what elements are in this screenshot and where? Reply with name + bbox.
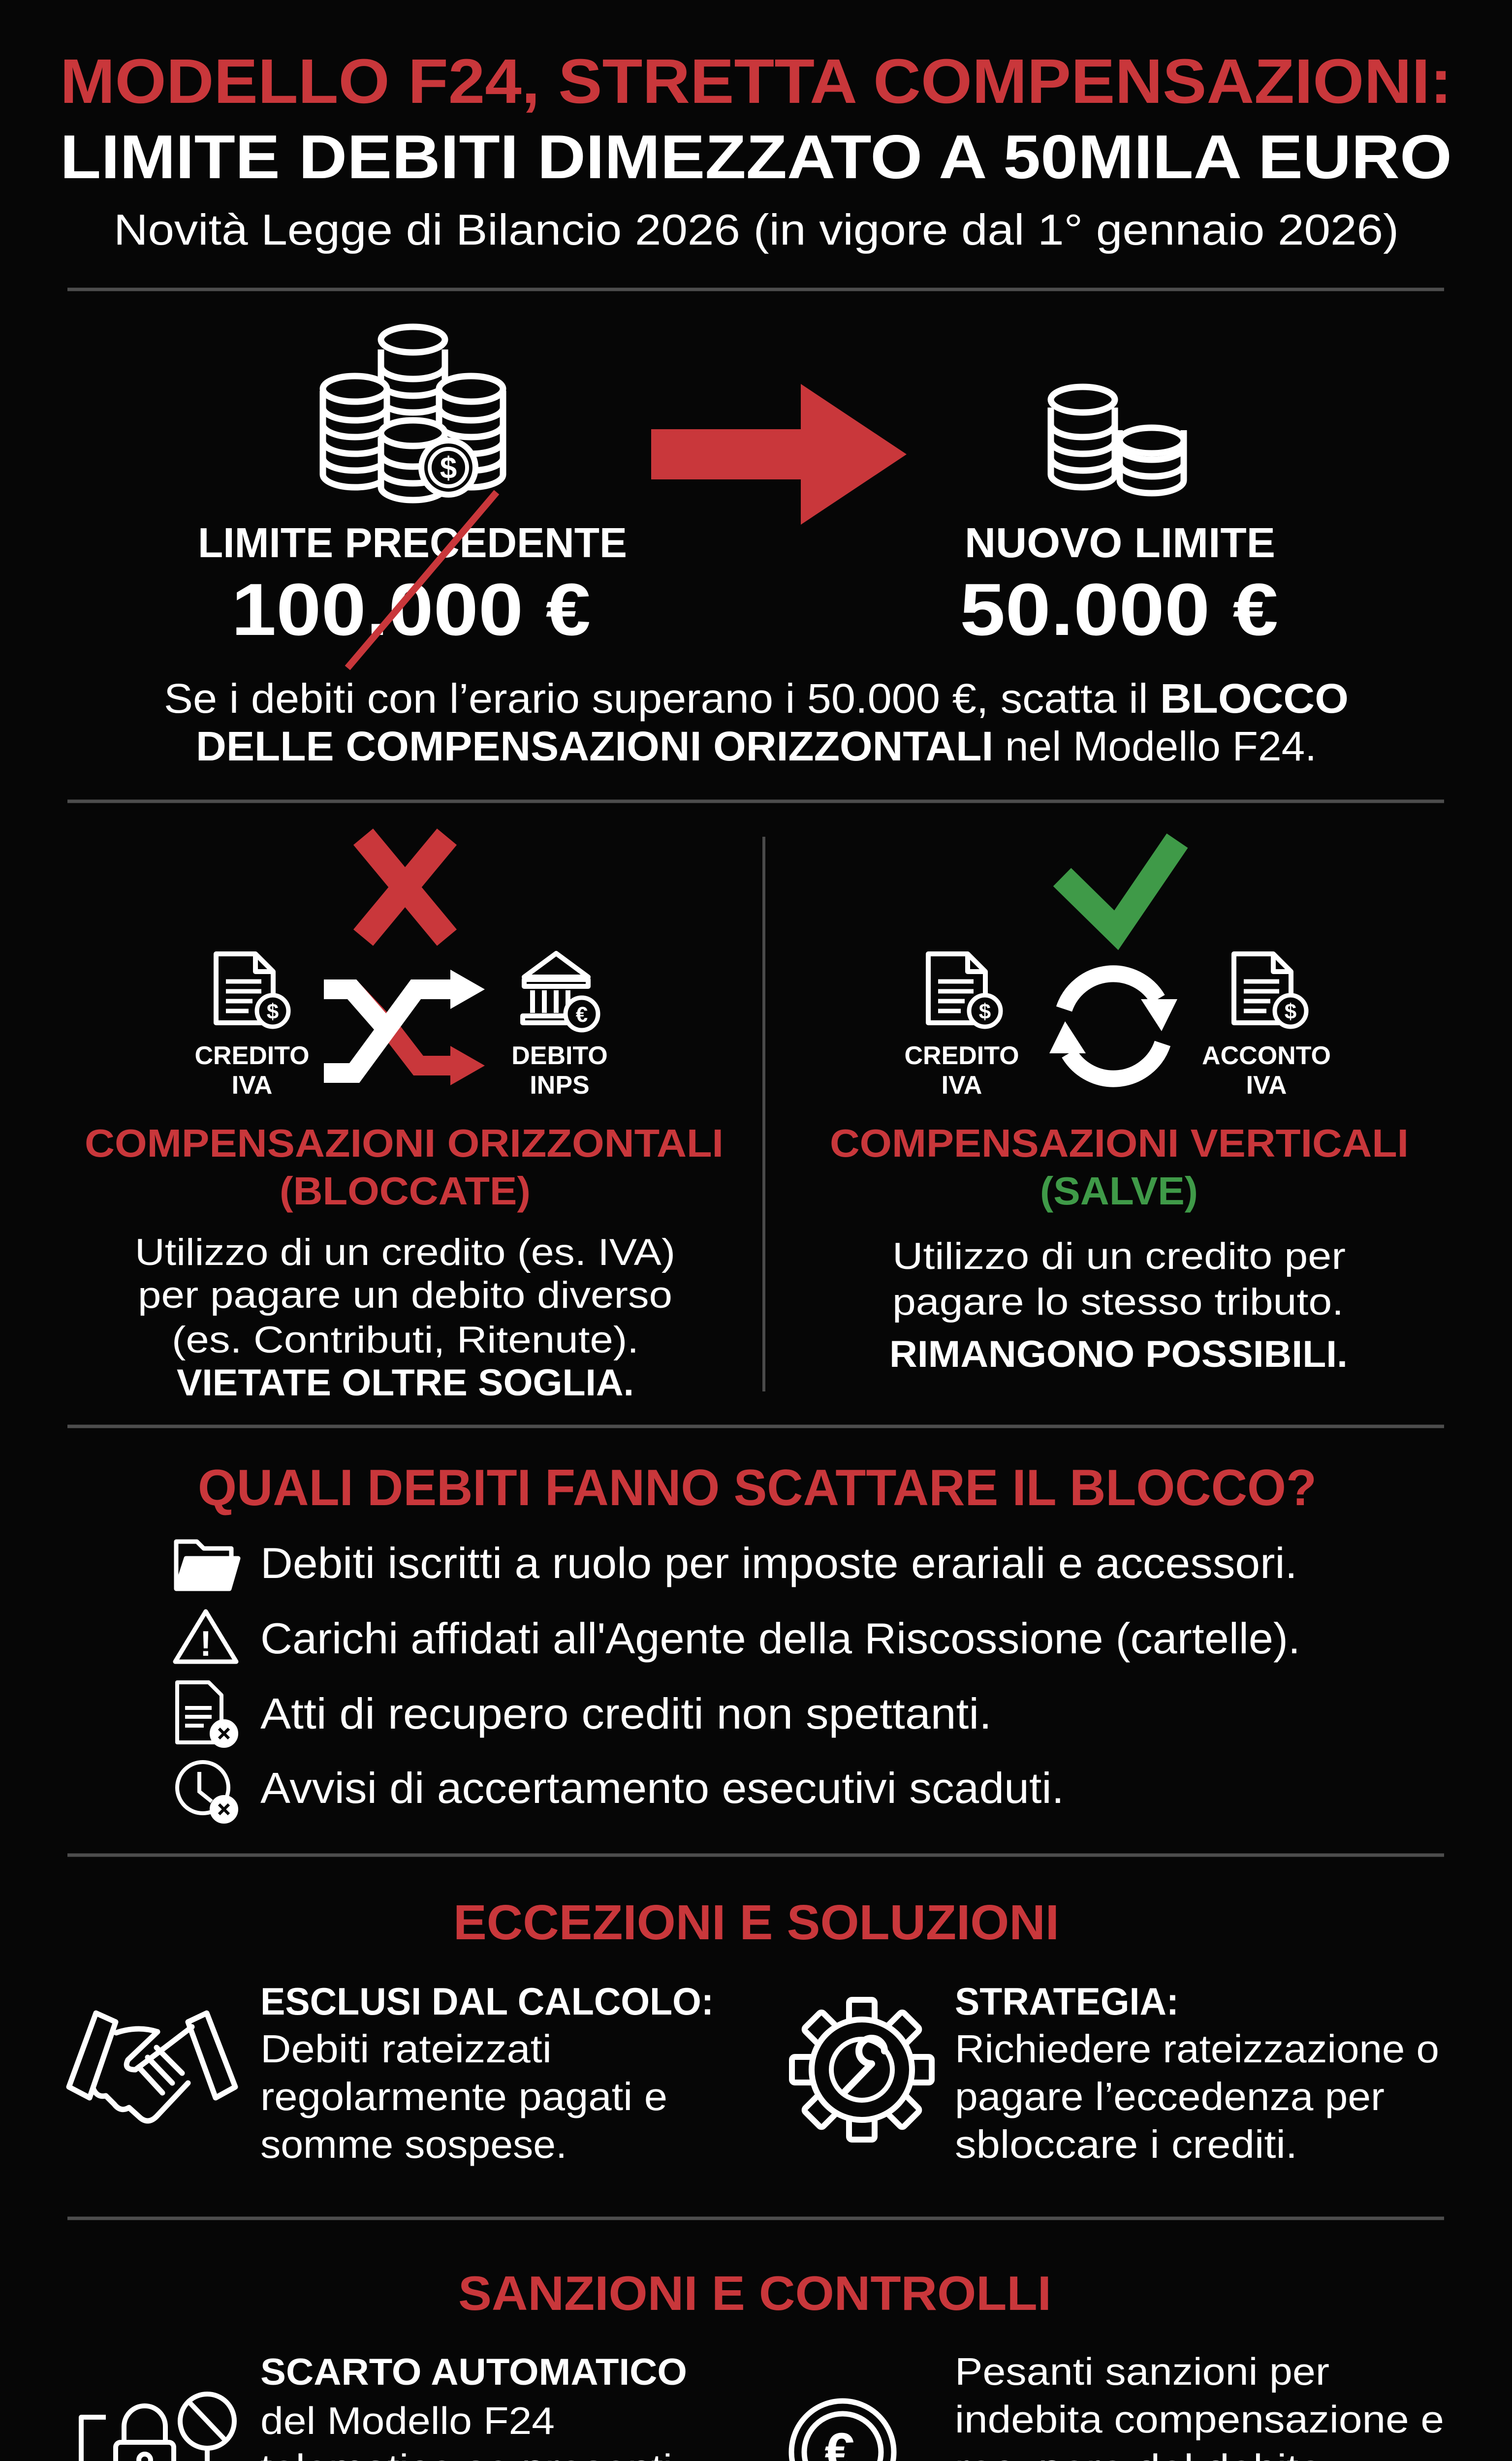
icon: shuffle arrows	[324, 970, 485, 1085]
text: description: (es. Contributi, Ritenute).	[172, 1319, 639, 1361]
text: item 3: Atti di recupero crediti non spettanti.	[260, 1689, 992, 1738]
block: scarto automatico	[81, 2351, 687, 2461]
icon: warning	[175, 1611, 236, 1664]
subtitle: Novità Legge di Bilancio 2026 (in vigore dal 1° gennaio 2026)	[114, 205, 1399, 254]
icon: red X	[363, 837, 447, 938]
text: item 4: Avvisi di accertamento esecutivi scaduti.	[260, 1764, 1064, 1812]
text: strategia: pagare l’eccedenza per	[955, 2075, 1385, 2118]
text: esclusi: regolarmente pagati e	[260, 2075, 667, 2118]
block: strategia	[792, 1980, 1439, 2166]
label: limite precedente: LIMITE PRECEDENTE	[198, 520, 627, 567]
heading: compensazioni orizzontali: COMPENSAZIONI ORIZZONTALI	[85, 1121, 724, 1165]
label: credito iva: IVA	[942, 1071, 982, 1100]
left column	[323, 376, 387, 487]
text: description: VIETATE OLTRE SOGLIA.	[177, 1362, 634, 1404]
text: strategia: Richiedere rateizzazione o	[955, 2027, 1439, 2071]
block: esclusi dal calcolo	[69, 1980, 714, 2166]
icon: folder	[176, 1542, 238, 1589]
heading: eccezioni e soluzioni: ECCEZIONI E SOLUZIONI	[453, 1895, 1059, 1950]
text: esclusi: Debiti rateizzati	[260, 2027, 552, 2071]
heading: sanzioni e controlli: SANZIONI E CONTROLLI	[458, 2266, 1051, 2320]
text: scarto	[260, 2351, 687, 2461]
text: esclusi	[260, 1980, 714, 2166]
text: esclusi: ESCLUSI DAL CALCOLO:	[260, 1980, 714, 2023]
label: nuovo limite: NUOVO LIMITE	[965, 520, 1275, 567]
icon: acconto document	[1234, 954, 1306, 1027]
panel: vertical compensation (allowed)	[830, 841, 1409, 1375]
list: triggering debts	[175, 1539, 1300, 1822]
label: credito iva: IVA	[232, 1071, 272, 1100]
panel: horizontal compensation (blocked)	[85, 837, 724, 1404]
text: sanzioni: Pesanti sanzioni per	[955, 2350, 1329, 2393]
text: item 2: Carichi affidati all'Agente della Riscossione (cartelle).	[260, 1614, 1300, 1663]
title line 1: MODELLO F24, STRETTA COMPENSAZIONI:	[60, 46, 1452, 117]
icon: circular arrows	[1049, 974, 1177, 1079]
icon: bank: €	[576, 1003, 588, 1027]
value: 100.000 euro: 100.000 €	[231, 568, 591, 651]
heading: quali debiti: QUALI DEBITI FANNO SCATTARE IL BLOCCO?	[198, 1459, 1317, 1516]
text: description: Utilizzo di un credito (es. IVA)	[135, 1231, 675, 1273]
text: description: pagare lo stesso tributo.	[892, 1281, 1344, 1323]
dollar coin: $	[440, 451, 457, 485]
text: scarto: SCARTO AUTOMATICO	[260, 2351, 687, 2393]
text: strategia: sbloccare i crediti.	[955, 2122, 1297, 2166]
right column	[439, 376, 503, 487]
heading: salve: (SALVE)	[1040, 1169, 1198, 1213]
text: description: RIMANGONO POSSIBILI.	[889, 1333, 1348, 1375]
heading: compensazioni verticali: COMPENSAZIONI VERTICALI	[830, 1121, 1409, 1165]
text: description	[135, 1231, 675, 1404]
title line 2: LIMITE DEBITI DIMEZZATO A 50MILA EURO	[60, 122, 1452, 191]
icon: green check	[1062, 841, 1177, 930]
intro paragraph: Se i debiti con l’erario superano i 50.000 €, scatta il BLOCCO	[164, 675, 1349, 722]
text: item 1: Debiti iscritti a ruolo per imposte erariali e accessori.	[260, 1539, 1297, 1587]
text: description: Utilizzo di un credito per	[892, 1235, 1346, 1277]
back center column	[381, 327, 445, 463]
front column	[381, 420, 445, 500]
icon: credit document	[216, 954, 288, 1027]
text: sanzioni	[955, 2350, 1447, 2461]
intro paragraph: DELLE COMPENSAZIONI ORIZZONTALI nel Modello F24.	[196, 723, 1317, 769]
icon: gear with wrench	[792, 2000, 932, 2140]
text: esclusi: somme sospese.	[260, 2122, 567, 2166]
block: sanzioni	[791, 2350, 1447, 2461]
text: sanzioni: indebita compensazione e	[955, 2398, 1444, 2441]
value: 50.000 euro: 50.000 €	[960, 568, 1278, 651]
icon: credit document	[928, 954, 1001, 1027]
icon: bank	[523, 953, 598, 1030]
text: strategia: STRATEGIA:	[955, 1980, 1179, 2023]
icon: clock with x	[177, 1762, 236, 1822]
text: scarto: del Modello F24	[260, 2399, 555, 2442]
heading: bloccate: (BLOCCATE)	[280, 1169, 531, 1213]
text: description	[889, 1235, 1348, 1375]
icon: coin stacks (new limit)	[1051, 387, 1184, 493]
intro paragraph	[164, 675, 1349, 769]
red strike-through slash	[347, 492, 497, 668]
icon: warning: !	[200, 1624, 212, 1664]
icon: coin stacks (old limit)	[323, 327, 503, 500]
label: credito iva: CREDITO	[904, 1041, 1019, 1070]
text: strategia	[955, 1980, 1439, 2166]
label: acconto iva: IVA	[1246, 1071, 1287, 1100]
icon: monitor with lock and ban	[81, 2394, 234, 2461]
dollar coin	[421, 441, 475, 495]
text: description: per pagare un debito diverso	[138, 1274, 672, 1316]
label: debito inps: DEBITO	[511, 1041, 608, 1070]
icon: handshake	[69, 2013, 235, 2121]
icon: document with x	[177, 1682, 236, 1746]
arrow: old to new	[651, 384, 907, 525]
label: debito inps: INPS	[530, 1071, 590, 1100]
icon: magnifier with euro	[791, 2401, 925, 2461]
label: credito iva: CREDITO	[194, 1041, 310, 1070]
label: acconto iva: ACCONTO	[1202, 1041, 1331, 1070]
